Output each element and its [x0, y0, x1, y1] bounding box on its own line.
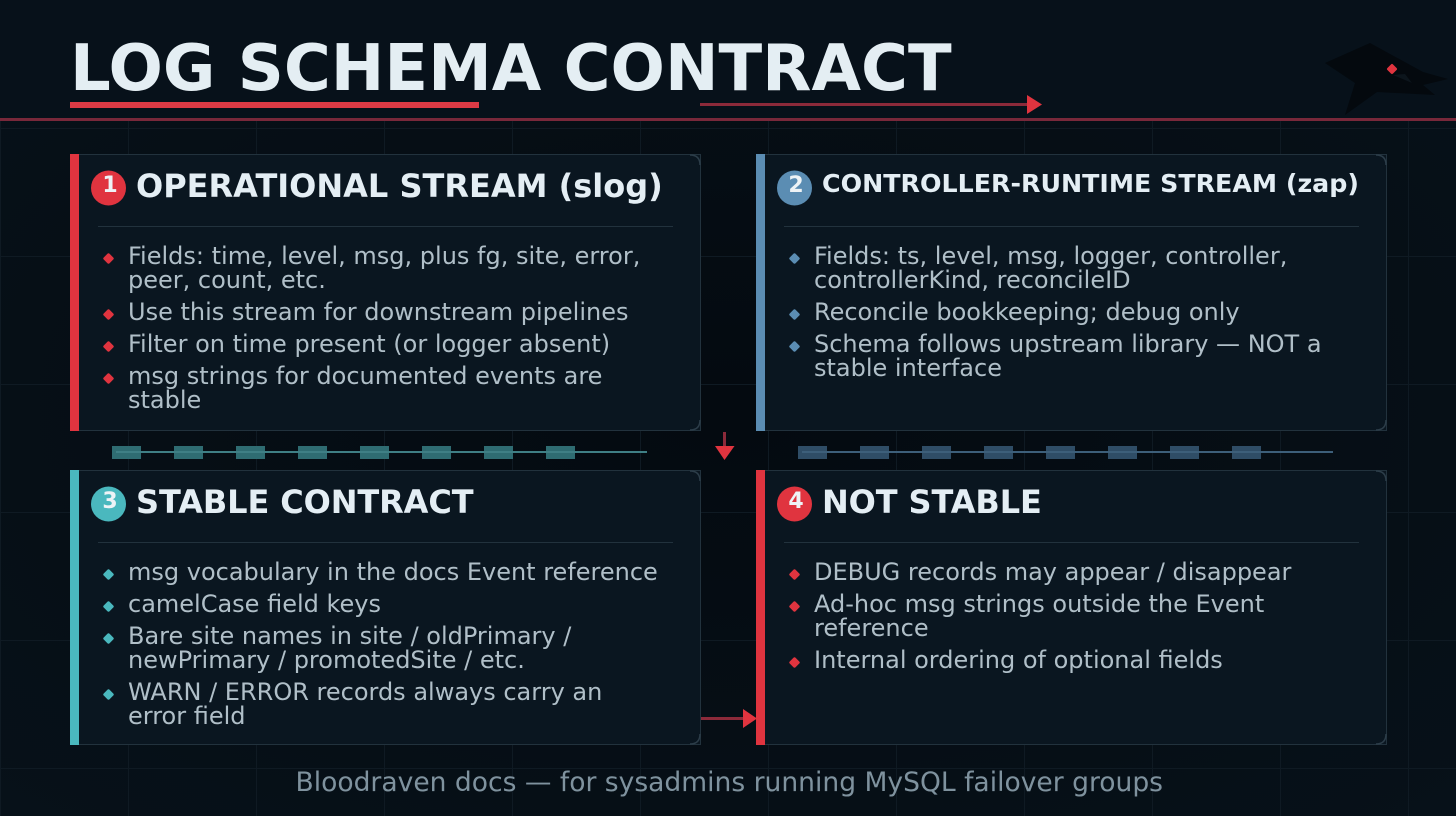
- list 2: Fields: ts, level, msg, logger, controller,: [814, 242, 1287, 270]
- panel: not stable: [756, 470, 1386, 745]
- list 4: Internal ordering of optional fields: [814, 646, 1223, 674]
- list 4: reference: [814, 614, 929, 642]
- badge 4: [777, 486, 812, 522]
- list 4: [791, 558, 1292, 674]
- header rule: [0, 118, 1456, 121]
- badge 3: 3: [102, 489, 118, 514]
- badge 2: [777, 170, 812, 206]
- panel: controller-runtime stream: [756, 154, 1386, 431]
- badge 1: 1: [102, 173, 118, 198]
- list 1: Use this stream for downstream pipelines: [128, 298, 628, 326]
- list 3: camelCase field keys: [128, 590, 381, 618]
- list 2: [791, 242, 1322, 382]
- badge 2: 2: [788, 173, 804, 198]
- list 2: Reconcile bookkeeping; debug only: [814, 298, 1240, 326]
- list 1: Filter on time present (or logger absent): [128, 330, 610, 358]
- list 1: Fields: time, level, msg, plus fg, site, error,: [128, 242, 640, 270]
- badge 4: 4: [788, 489, 804, 514]
- connector: teal dashes: [112, 446, 647, 459]
- list 3: newPrimary / promotedSite / etc.: [128, 646, 525, 674]
- heading 3: STABLE CONTRACT: [136, 483, 474, 521]
- heading 2: CONTROLLER-RUNTIME STREAM (zap): [822, 169, 1359, 198]
- heading 4: NOT STABLE: [822, 483, 1042, 521]
- arrow: right: [701, 709, 757, 728]
- badge 3: [91, 486, 126, 522]
- list 2: stable interface: [814, 354, 1002, 382]
- list 3: error field: [128, 702, 246, 730]
- arrow: header: [700, 95, 1042, 114]
- footer: Bloodraven docs — for sysadmins running MySQL failover groups: [296, 767, 1163, 798]
- list 3: WARN / ERROR records always carry an: [128, 678, 602, 706]
- badge 1: [91, 170, 126, 206]
- panel: operational stream: [70, 154, 700, 431]
- list 4: DEBUG records may appear / disappear: [814, 558, 1292, 586]
- heading 1: OPERATIONAL STREAM (slog): [136, 167, 663, 205]
- title: LOG SCHEMA CONTRACT: [70, 32, 952, 106]
- connector: blue dashes: [798, 446, 1333, 459]
- icon: raven logo: [1325, 43, 1448, 115]
- arrow: down: [715, 432, 734, 460]
- list 1: stable: [128, 386, 201, 414]
- list 1: [105, 242, 640, 414]
- title underline: [70, 102, 479, 108]
- list 3: Bare site names in site / oldPrimary /: [128, 622, 572, 650]
- list 3: msg vocabulary in the docs Event reference: [128, 558, 658, 586]
- list 1: msg strings for documented events are: [128, 362, 602, 390]
- list 2: Schema follows upstream library — NOT a: [814, 330, 1322, 358]
- list 4: Ad-hoc msg strings outside the Event: [814, 590, 1264, 618]
- list 2: controllerKind, reconcileID: [814, 266, 1131, 294]
- list 3: [105, 558, 658, 730]
- panel: stable contract: [70, 470, 700, 745]
- list 1: peer, count, etc.: [128, 266, 326, 294]
